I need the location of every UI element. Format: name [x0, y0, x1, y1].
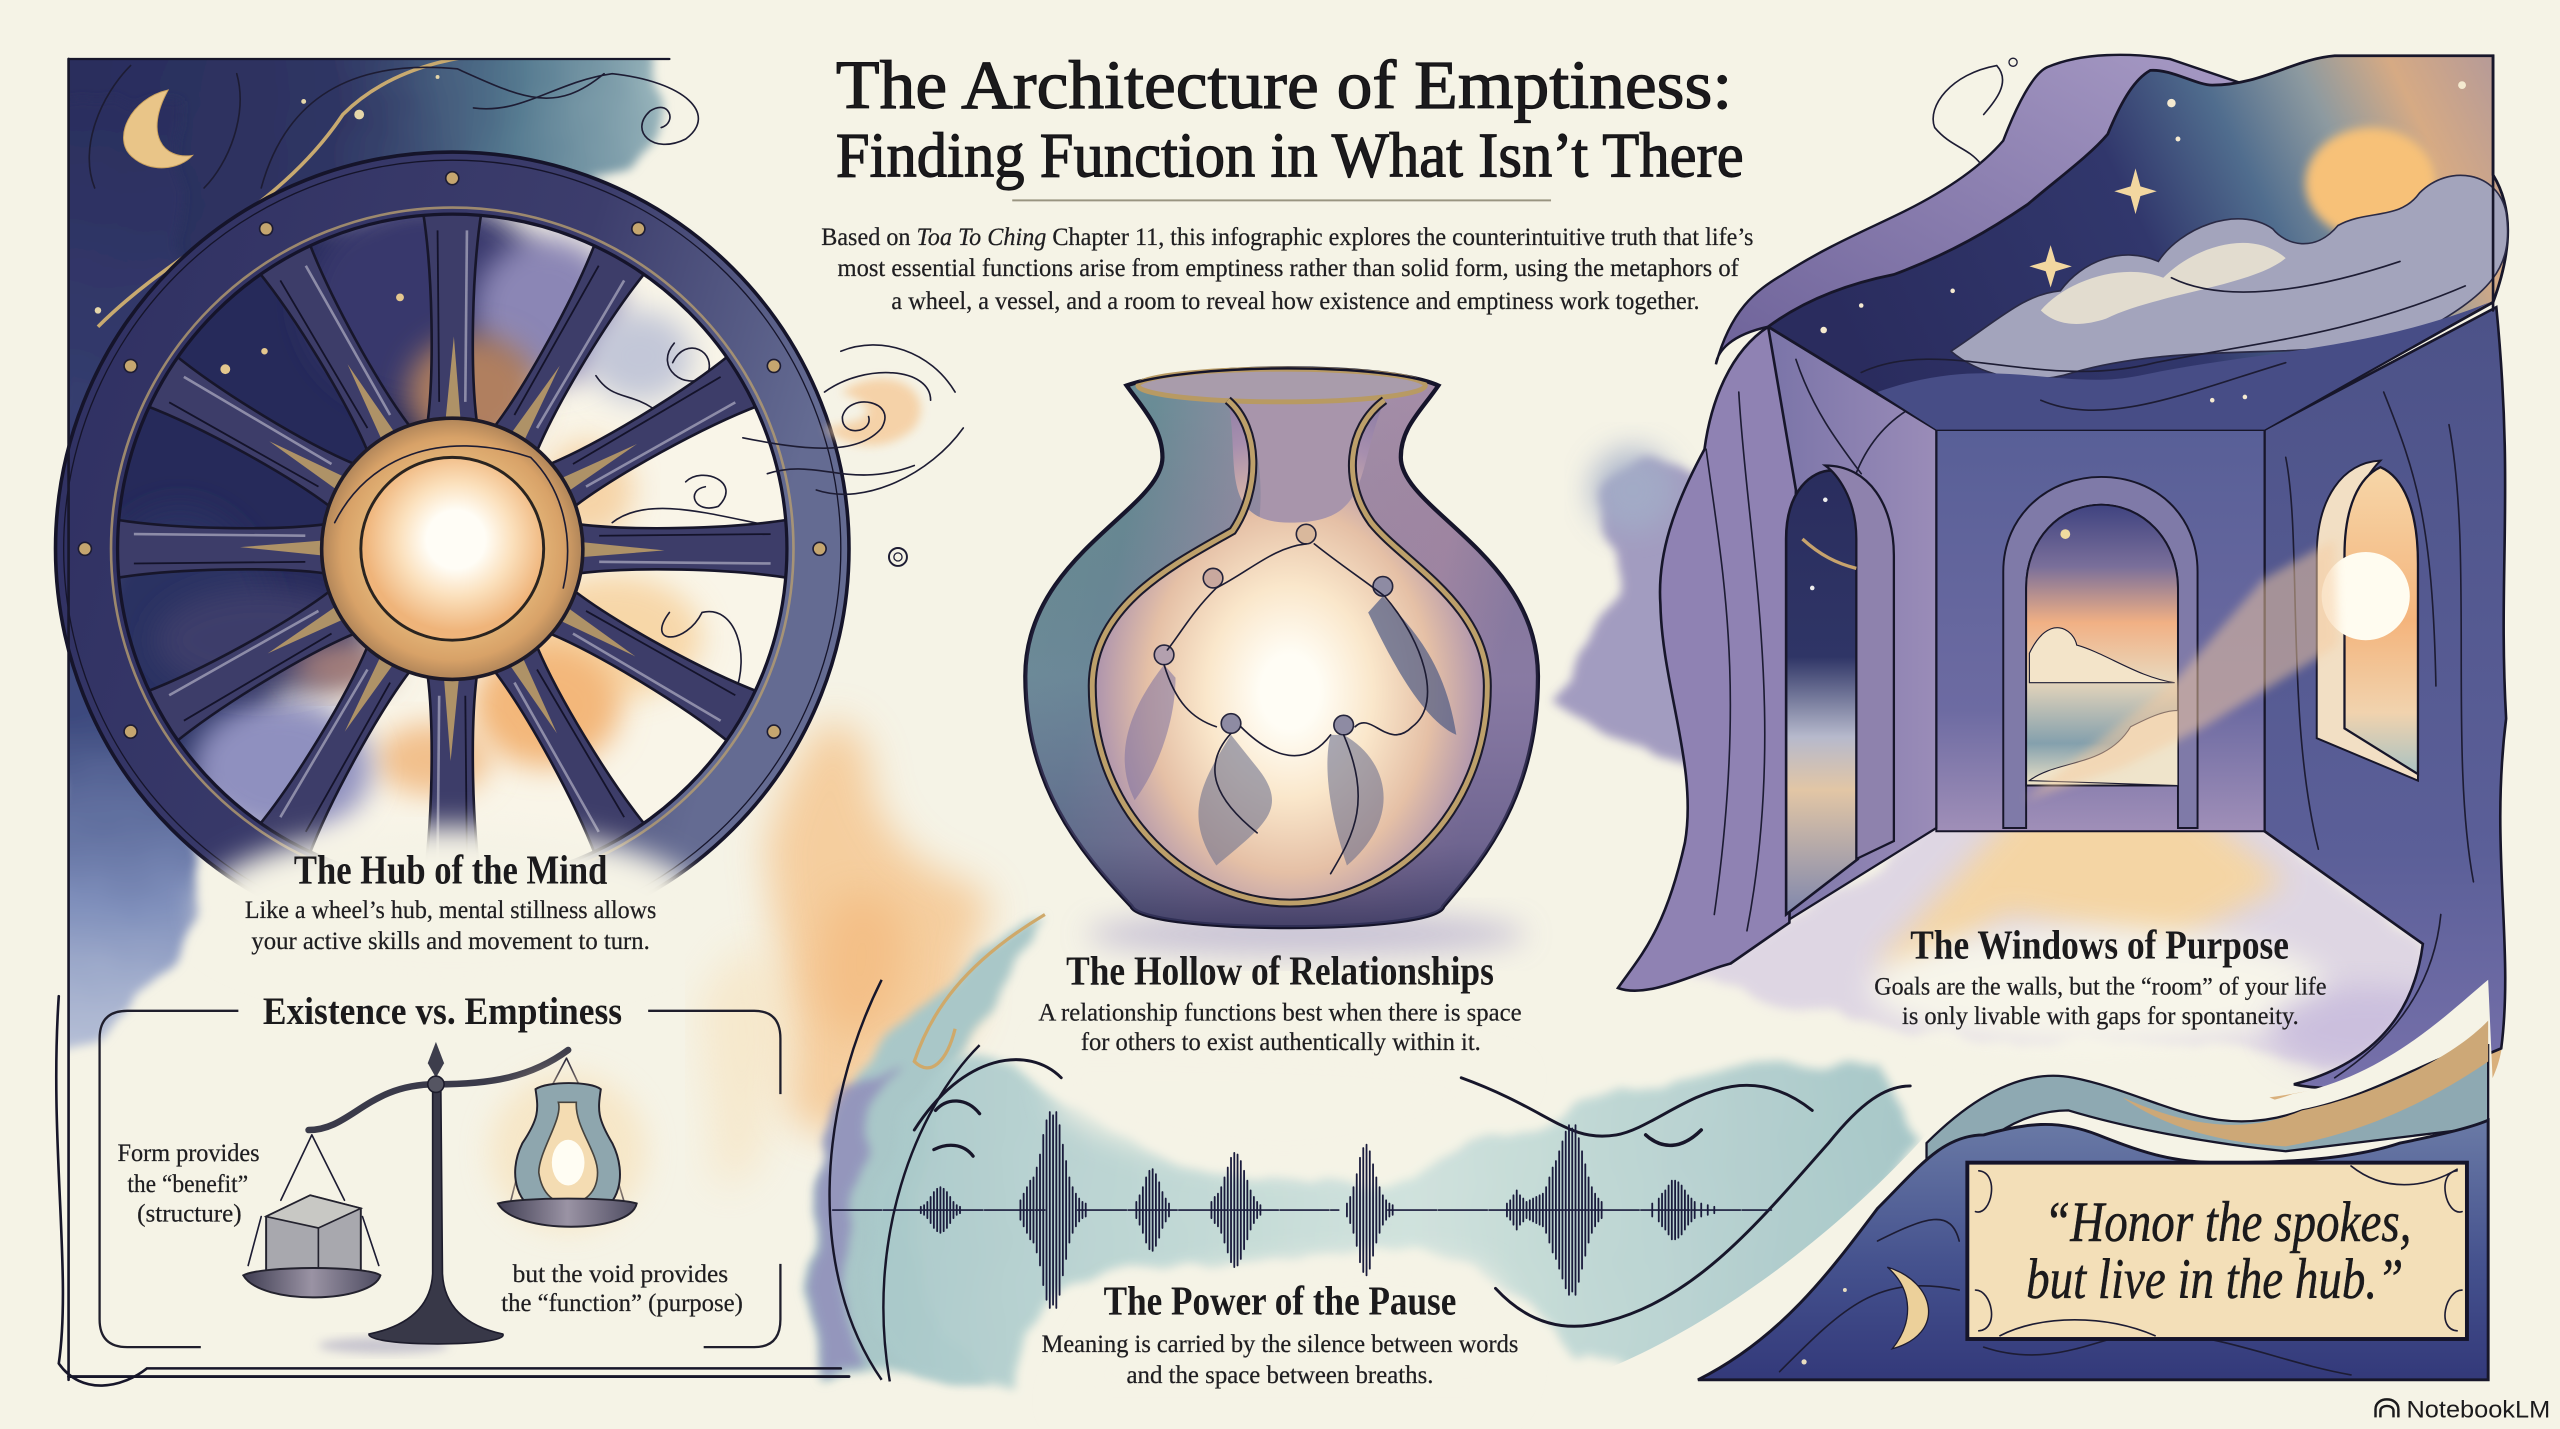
title [836, 47, 1744, 191]
heading: The Hub of the Mind: The Hub of the Mind [294, 847, 608, 892]
text: pause description: Meaning is carried by the silence between words [1042, 1330, 1518, 1358]
right window [2317, 461, 2418, 781]
ceiling sky [1768, 56, 2508, 430]
left wall [1768, 327, 1936, 919]
text: hollow description: for others to exist authentically within it. [1081, 1028, 1481, 1056]
icon: closed eye left [934, 1101, 980, 1156]
navy panel [1698, 1120, 2488, 1380]
text: windows description [1874, 972, 2327, 1030]
room floor wash [1698, 825, 2449, 1061]
icon: NotebookLM logo [2376, 1399, 2398, 1417]
title: The Architecture of Emptiness: [836, 47, 1732, 123]
wheel interior watercolor [120, 217, 758, 842]
vase shadow [1086, 911, 1527, 957]
vase rim [1138, 369, 1425, 402]
vase illustration [1025, 368, 1538, 1056]
right drape and tan ribbon [2269, 980, 2503, 1119]
heading: The Hollow of Relationships: The Hollow of Relationships [1066, 949, 1494, 994]
text: hub description: your active skills and movement to turn. [251, 927, 650, 955]
watercolor wash: orange [707, 727, 987, 1184]
text: pause description [1042, 1330, 1518, 1389]
quote plaque [1967, 1163, 2467, 1339]
right pan with glowing vase [490, 1073, 647, 1230]
quote text: “Honor the spokes, [2044, 1191, 2411, 1254]
title: Finding Function in What Isn’t There [836, 120, 1744, 191]
sky sun [2305, 128, 2436, 239]
panel: room with windows [1618, 55, 2508, 1119]
quote text: but live in the hub.” [2026, 1248, 2403, 1311]
intro text: a wheel, a vessel, and a room to reveal how existence and emptiness work together. [891, 287, 1700, 315]
waveform [833, 1112, 1771, 1308]
wagon wheel illustration [56, 152, 849, 990]
icon: crescent moon top left [124, 90, 193, 168]
teal ribbon and pause wave wash [807, 914, 1927, 1404]
corner ribbons [1574, 980, 2495, 1381]
panel: Existence vs. Emptiness [100, 990, 780, 1354]
NotebookLM mark: NotebookLM [2407, 1396, 2550, 1423]
comparison box outline [100, 1011, 780, 1347]
text: hub description: Like a wheel’s hub, mental stillness allows [245, 896, 656, 924]
text: hollow description: A relationship functions best when there is space [1038, 999, 1522, 1027]
text: void provides [501, 1260, 743, 1317]
vase neck mauve panel [1228, 392, 1388, 539]
wheel rivets [78, 172, 826, 738]
flourish above room [1933, 66, 2003, 163]
top drape band [1716, 55, 2286, 364]
text: hollow description [1038, 999, 1522, 1056]
panel: quote corner [1574, 980, 2495, 1381]
intro text [821, 223, 1753, 315]
caption fade under wheel [199, 826, 705, 990]
back wall [1936, 430, 2264, 831]
text: void provides: the “function” (purpose) [501, 1289, 743, 1317]
wheel spokes [114, 211, 790, 887]
heading: The Windows of Purpose: The Windows of Purpose [1910, 923, 2289, 968]
text: windows description: Goals are the walls, but the “room” of your life [1874, 972, 2327, 1000]
wind swirls beside the wheel [743, 345, 963, 566]
clouds [1951, 175, 2508, 379]
center doorway [2003, 477, 2198, 828]
text: form provides: the “benefit” [127, 1170, 248, 1198]
text: hub description [245, 896, 656, 955]
left doorway [1786, 466, 1894, 914]
text: windows description: is only livable with gaps for spontaneity. [1902, 1002, 2299, 1030]
balance scale [243, 1042, 647, 1354]
heading: Existence vs. Emptiness: Existence vs. Emptiness [263, 990, 622, 1033]
text: form provides [118, 1139, 260, 1227]
dancing figures [1125, 524, 1456, 874]
left drape [1618, 327, 1796, 991]
icon: closed eye right [1646, 1130, 1701, 1145]
stars [2114, 168, 2157, 214]
intro text: most essential functions arise from emptiness rather than solid form, using the metaphors of [838, 254, 1739, 282]
text: form provides: (structure) [137, 1199, 242, 1227]
wheel rim [56, 152, 849, 946]
panel: dark night sky, top left [49, 41, 702, 1045]
text: void provides: but the void provides [513, 1260, 728, 1288]
vase hollow window [1092, 400, 1487, 903]
heading: The Power of the Pause: The Power of the Pause [1104, 1278, 1456, 1323]
icon: crescent moon lower [1887, 1267, 1929, 1349]
intro text: Based on Toa To Ching Chapter 11, this infographic explores the counterintuitive truth that life’s [821, 223, 1753, 251]
wheel hub [322, 418, 583, 679]
vase body [1025, 368, 1538, 927]
lavender wash between vase and room [1551, 448, 1731, 833]
right wall and drape [2264, 307, 2506, 1088]
light beam [2024, 539, 2338, 800]
left pan with stone cube [243, 1195, 380, 1297]
quote text [2026, 1191, 2411, 1311]
text: form provides: Form provides [118, 1139, 260, 1167]
text: pause description: and the space between breaths. [1127, 1361, 1433, 1389]
